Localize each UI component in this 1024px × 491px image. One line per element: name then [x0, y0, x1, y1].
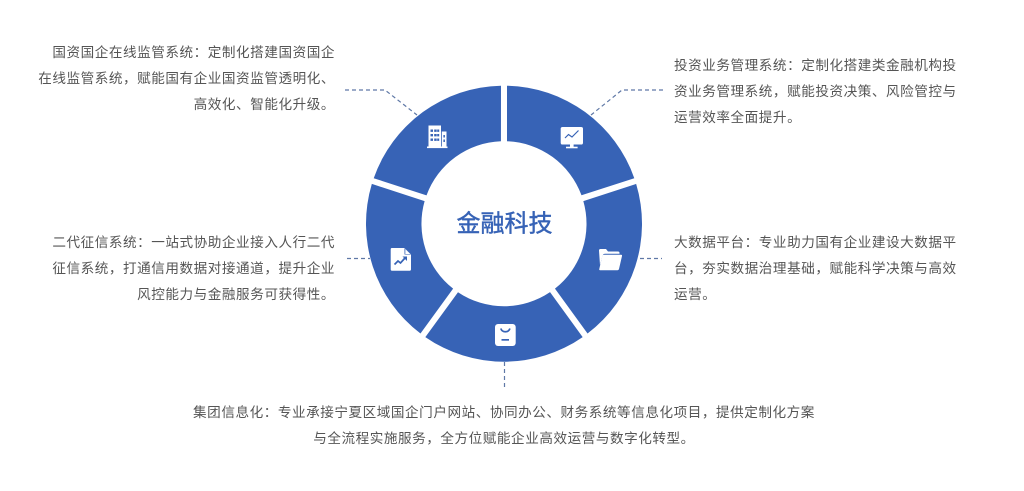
text: state assets supervision system: 国资国企在线监管系统：定制化搭建国资国企	[52, 45, 335, 60]
ring segment: top left	[374, 57, 517, 212]
icon: document with trend arrow	[391, 248, 411, 271]
connector: credit system	[347, 258, 370, 260]
connector: investment system	[591, 90, 663, 115]
text: second-generation credit system: 二代征信系统：一站式协助企业接入人行二代	[52, 235, 335, 250]
text: investment business management system: 运营效率全面提升。	[674, 110, 801, 125]
icon: rounded tag	[495, 324, 516, 346]
connector: big data platform	[640, 258, 662, 260]
text: big data platform: 运营。	[674, 287, 716, 302]
text: group informatization: 与全流程实施服务，全方位赋能企业高效运营与数字化转型。	[313, 431, 695, 446]
text: big data platform	[674, 235, 957, 302]
text: state assets supervision system	[38, 45, 335, 112]
text: second-generation credit system: 风控能力与金融服务可获得性。	[137, 287, 335, 302]
text: big data platform: 大数据平台：专业助力国有企业建设大数据平	[674, 235, 957, 250]
connector: group informatization	[504, 362, 506, 389]
text: investment business management system	[674, 58, 957, 125]
ring segment: top right	[507, 86, 634, 195]
ring segment: left	[317, 170, 485, 334]
text: second-generation credit system	[52, 235, 335, 302]
text: state assets supervision system: 高效化、智能化升级。	[194, 97, 335, 112]
text: investment business management system: 资业务管理系统，赋能投资决策、风险管控与	[674, 84, 957, 99]
text: investment business management system: 投资业务管理系统：定制化搭建类金融机构投	[674, 58, 957, 73]
text: group informatization: 集团信息化：专业承接宁夏区域国企门户网站、协同办公、财务系统等信息化项目，提供定制化方案	[193, 405, 815, 420]
icon: monitor with chart	[561, 127, 583, 148]
ring segment: bottom	[415, 248, 583, 412]
text: state assets supervision system: 在线监管系统，赋能国有企业国资监管透明化、	[38, 71, 335, 86]
text: group informatization	[193, 405, 815, 446]
connector: state assets system	[345, 90, 417, 115]
ring segment: right	[532, 184, 675, 339]
icon: office building	[427, 126, 448, 148]
icon: folder	[599, 249, 622, 270]
text: big data platform: 台，夯实数据治理基础，赋能科学决策与高效	[674, 261, 957, 276]
text: second-generation credit system: 征信系统，打通信用数据对接通道，提升企业	[52, 261, 335, 276]
center title: 金融科技	[456, 210, 552, 238]
